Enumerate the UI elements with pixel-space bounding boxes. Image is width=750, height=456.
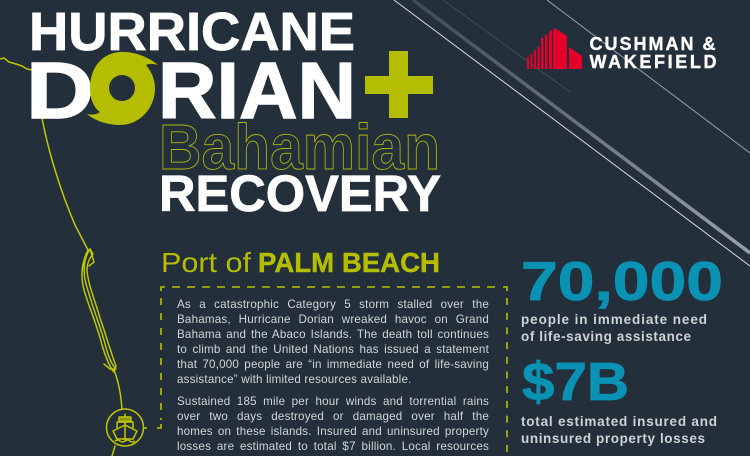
stat label: people in need xyxy=(521,312,707,344)
body copy text block xyxy=(177,298,489,453)
body copy text block: over two days destroyed or damaged over half the xyxy=(177,410,489,423)
body copy text block: Bahama and the Abaco Islands. The death toll continues xyxy=(177,328,489,341)
stat label: property losses xyxy=(521,414,717,446)
stat: $7B: $7B xyxy=(522,352,629,412)
logo wordmark xyxy=(590,34,716,72)
coastline map route xyxy=(0,58,122,456)
port heading: Port of xyxy=(161,247,251,278)
title letters RIAN: RIAN xyxy=(158,46,356,135)
icon: hurricane symbol as O xyxy=(87,52,158,125)
body copy text block: homes on these islands. Insured and uninsured property xyxy=(177,425,489,438)
logo: red building mark xyxy=(527,28,582,69)
port heading: PALM BEACH xyxy=(258,247,440,278)
dashed text frame xyxy=(143,287,507,456)
stat label: people in need: people in immediate need xyxy=(521,312,707,327)
body copy text block: that 70,000 people are “in immediate need of life-saving xyxy=(177,358,489,371)
stat label: property losses: total estimated insured and xyxy=(521,414,717,429)
body copy text block: to climb and the United Nations has issued a statement xyxy=(177,343,489,356)
bahamian outlined word: Bahamian xyxy=(159,111,440,183)
title letter D: D xyxy=(26,46,94,135)
body copy text block: Bahamas, Hurricane Dorian wreaked havoc on Grand xyxy=(177,313,489,326)
hurricane title line: HURRICANE xyxy=(29,3,355,62)
body copy text block: As a catastrophic Category 5 storm stalled over the xyxy=(177,298,489,311)
stat label: people in need: of life-saving assistance xyxy=(521,329,691,344)
stat label: property losses: uninsured property losses xyxy=(521,431,705,446)
stat: 70,000: 70,000 xyxy=(521,250,723,312)
logo wordmark: WAKEFIELD xyxy=(590,52,716,72)
icon: port ship in circle xyxy=(106,409,144,446)
body copy text block: assistance” with limited resources available. xyxy=(177,373,412,386)
port heading xyxy=(161,247,440,278)
diagonal light streaks xyxy=(394,0,750,266)
body copy text block: losses are estimated to total $7 billion. Local resources xyxy=(177,440,489,453)
body copy text block: Sustained 185 mile per hour winds and torrential rains xyxy=(177,395,489,408)
logo wordmark: CUSHMAN & xyxy=(590,34,716,54)
recovery word: RECOVERY xyxy=(159,165,441,222)
plus sign xyxy=(365,51,433,118)
